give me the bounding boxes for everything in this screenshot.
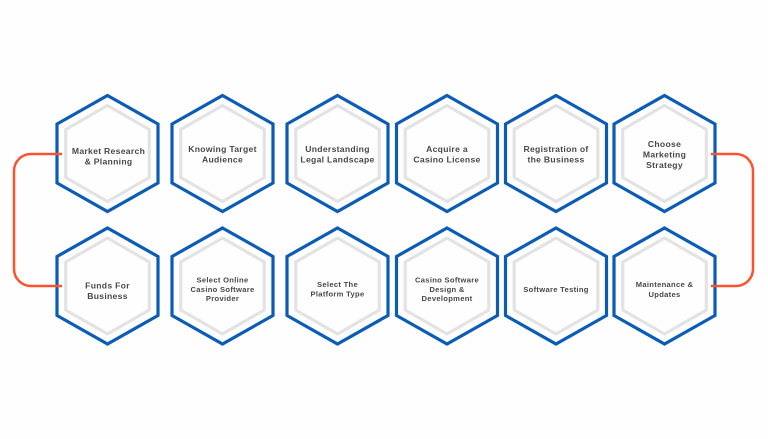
- hexagon: Select The Platform Type: Select The: [317, 280, 358, 289]
- hexagon: Maintenance & Updates: [614, 228, 715, 344]
- hexagon: Knowing Target Audience: Knowing Target: [188, 144, 257, 154]
- hexagon: Select Online Casino Software Provider: Casino Software: [190, 285, 254, 294]
- hexagon: Acquire a Casino License: Casino License: [413, 154, 481, 164]
- hexagon: Registration of the Business: the Business: [527, 154, 585, 164]
- hexagon: Select The Platform Type: [287, 228, 388, 344]
- hexagon: Market Research & Planning: [57, 96, 158, 212]
- hexagon: Maintenance & Updates: Updates: [648, 290, 681, 299]
- hexagon: Casino Software Design & Development: Development: [422, 294, 473, 303]
- hexagon: Choose Marketing Strategy: Strategy: [646, 160, 683, 170]
- hexagon: Maintenance & Updates: Maintenance &: [636, 280, 693, 289]
- hexagon: Market Research & Planning: Market Research: [72, 146, 145, 156]
- hexagon: Understanding Legal Landscape: Understanding: [305, 144, 370, 154]
- hexagon: Select Online Casino Software Provider: Provider: [206, 294, 239, 303]
- hexagon: Software Testing: Software Testing: [523, 285, 589, 294]
- hexagon: Casino Software Design & Development: Design &: [429, 285, 465, 294]
- hexagon: Choose Marketing Strategy: Choose: [648, 139, 681, 149]
- hexagon: Casino Software Design & Development: Casino Software: [415, 276, 479, 284]
- hexagon: Choose Marketing Strategy: Marketing: [643, 150, 686, 160]
- left connector arrow: [14, 154, 62, 286]
- hexagon: Knowing Target Audience: Audience: [202, 154, 243, 164]
- hexagon: Software Testing: [506, 228, 606, 344]
- hexagon: Registration of the Business: Registration of: [523, 144, 589, 154]
- hexagon: Registration of the Business: [506, 96, 606, 212]
- hexagon: Select Online Casino Software Provider: [172, 228, 273, 344]
- hexagon: Select Online Casino Software Provider: Select Online: [196, 276, 249, 284]
- hexagon: Acquire a Casino License: [396, 96, 498, 212]
- hexagon: Casino Software Design & Development: [396, 228, 498, 344]
- hexagon: Understanding Legal Landscape: Legal Landscape: [300, 154, 375, 164]
- hexagon: Knowing Target Audience: [172, 96, 273, 212]
- hexagon: Funds For Business: Business: [87, 291, 128, 301]
- hexagon: Acquire a Casino License: Acquire a: [426, 144, 468, 154]
- hexagon: Funds For Business: [57, 228, 158, 344]
- hexagon: Funds For Business: Funds For: [85, 280, 130, 290]
- hexagon: Understanding Legal Landscape: [287, 96, 388, 212]
- hexagon: Choose Marketing Strategy: [614, 96, 715, 212]
- right connector arrow: [711, 154, 753, 286]
- hexagon: Market Research & Planning: & Planning: [85, 156, 132, 166]
- hexagon: Select The Platform Type: Platform Type: [311, 290, 364, 298]
